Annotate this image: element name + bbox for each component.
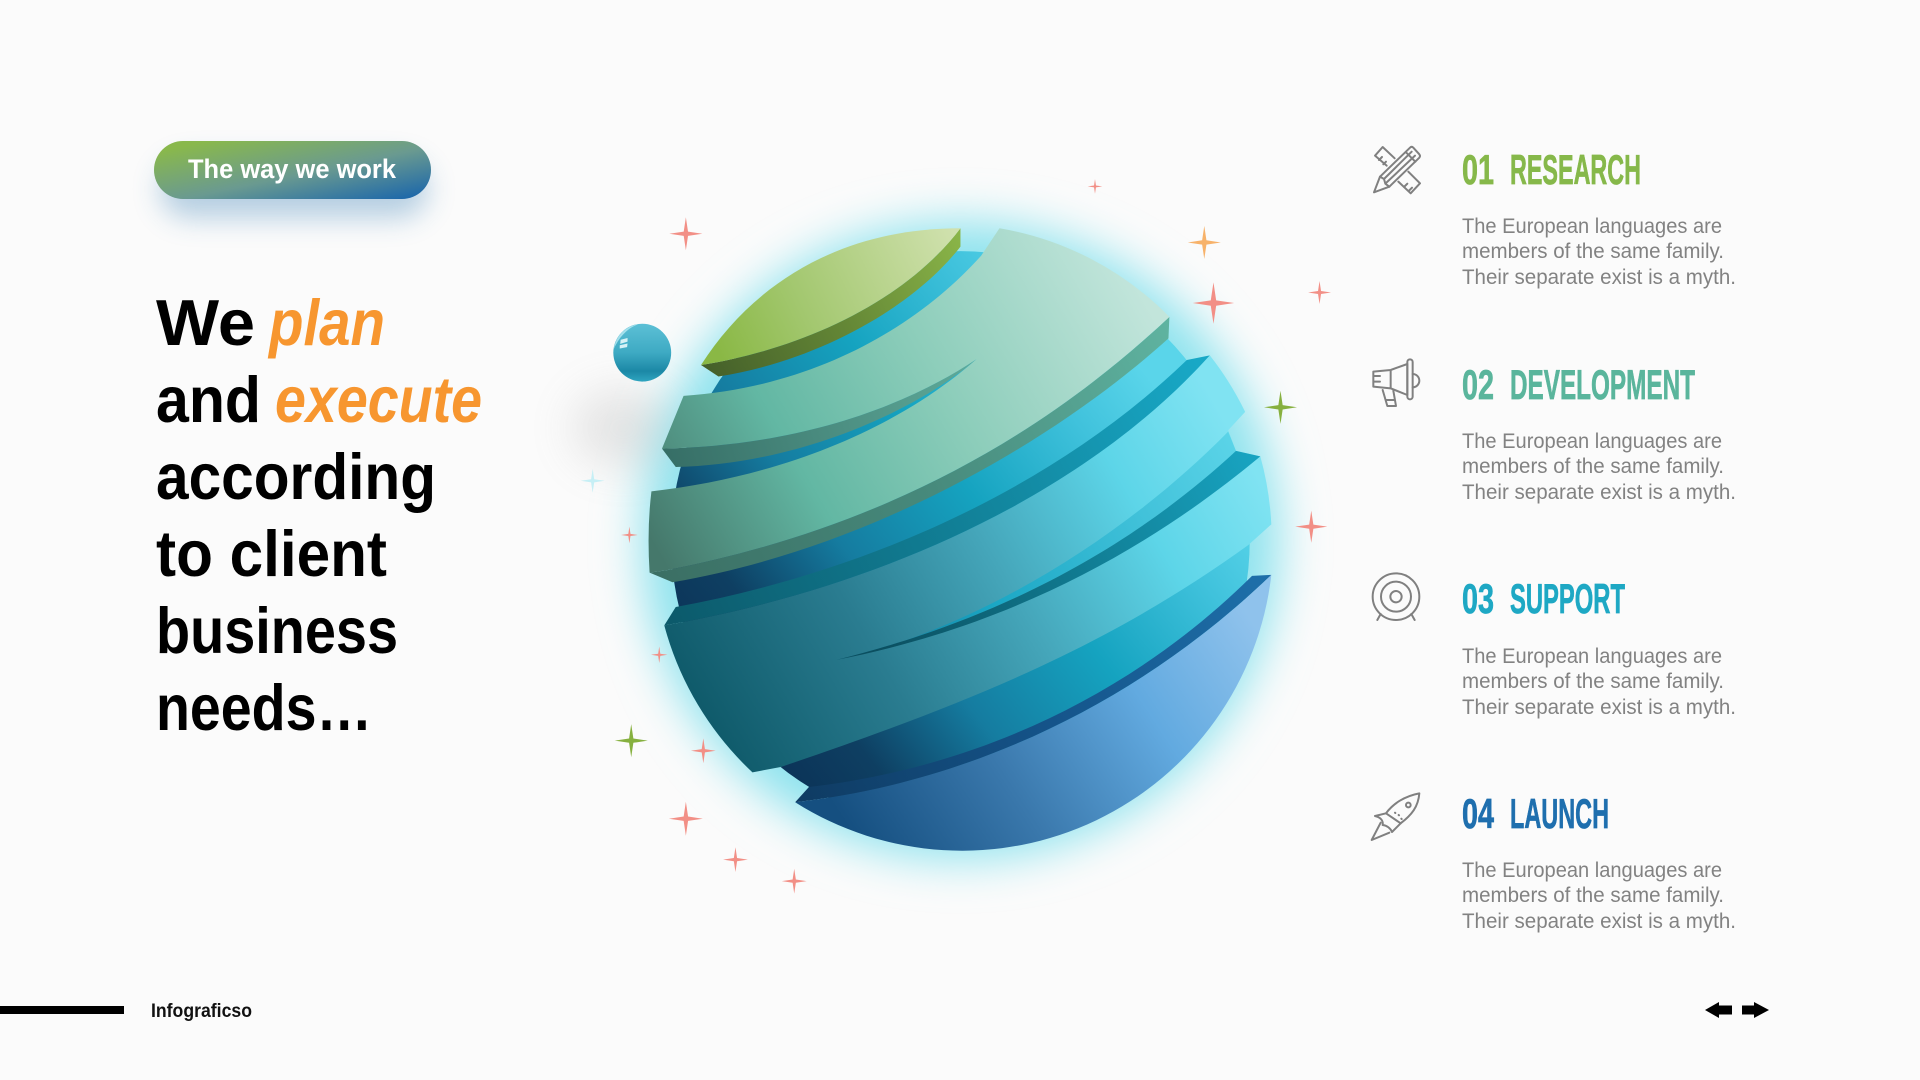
badge: The way we work — [154, 141, 431, 218]
headline: to client — [156, 517, 387, 590]
bottom cap — [795, 575, 1271, 851]
body text: members of the same family. — [1462, 884, 1724, 907]
heading: 04 — [1462, 790, 1494, 837]
body text: Their separate exist is a myth. — [1462, 696, 1736, 719]
body text — [1462, 215, 1736, 289]
teal band wall — [650, 317, 1169, 582]
middle band — [664, 355, 1271, 772]
heading: 03 — [1462, 575, 1494, 622]
body text: The European languages are — [1462, 859, 1722, 882]
body text: The European languages are — [1462, 215, 1722, 238]
navigation arrows — [1705, 1002, 1769, 1018]
body text: members of the same family. — [1462, 670, 1724, 693]
footer brand: Infograficso — [151, 1001, 252, 1022]
headline: We — [156, 286, 255, 359]
step 02: development — [1373, 359, 1736, 504]
headline: plan — [267, 286, 385, 359]
headline — [156, 286, 482, 744]
planet illustration — [572, 179, 1331, 894]
green leaf wall — [701, 228, 960, 377]
headline: business — [156, 594, 398, 667]
body text: The European languages are — [1462, 645, 1722, 668]
step 03: support — [1373, 573, 1736, 719]
headline: according — [156, 440, 436, 513]
headline: execute — [275, 363, 482, 436]
step 01: research — [1374, 146, 1736, 289]
step 04: launch — [1372, 790, 1736, 933]
sparkle stars — [581, 179, 1331, 894]
planet core — [671, 251, 1250, 830]
middle band top wall — [664, 355, 1210, 625]
body text: The European languages are — [1462, 430, 1722, 453]
step 01: research: RESEARCH — [1510, 146, 1641, 193]
body text — [1462, 859, 1736, 933]
body text: Their separate exist is a myth. — [1462, 266, 1736, 289]
icon: target — [1373, 573, 1419, 620]
body text: Their separate exist is a myth. — [1462, 910, 1736, 933]
body text: Their separate exist is a myth. — [1462, 481, 1736, 504]
moon shadow — [572, 389, 673, 467]
heading: 02 — [1462, 361, 1494, 408]
step 02: development: DEVELOPMENT — [1510, 361, 1695, 408]
footer bar — [0, 1006, 124, 1014]
teal slit wall — [662, 359, 977, 467]
body text: members of the same family. — [1462, 240, 1724, 263]
badge: The way we work: The way we work — [188, 154, 397, 184]
band slit light strip — [836, 432, 1236, 660]
body text — [1462, 430, 1736, 504]
small sphere — [613, 324, 671, 382]
bottom cap edge — [795, 575, 1271, 802]
green leaf surface — [701, 228, 960, 365]
body text — [1462, 645, 1736, 719]
icon: pencil and ruler — [1374, 147, 1420, 193]
icon: megaphone — [1373, 359, 1419, 406]
planet glow — [641, 221, 1280, 860]
body text: members of the same family. — [1462, 455, 1724, 478]
step 03: support: SUPPORT — [1510, 575, 1625, 622]
icon: rocket — [1372, 793, 1419, 840]
headline: and — [156, 363, 261, 436]
headline: needs… — [156, 671, 372, 744]
step 04: launch: LAUNCH — [1510, 790, 1609, 837]
heading: 01 — [1462, 146, 1494, 193]
teal band surface — [649, 228, 1169, 573]
band slit wall — [836, 451, 1260, 660]
